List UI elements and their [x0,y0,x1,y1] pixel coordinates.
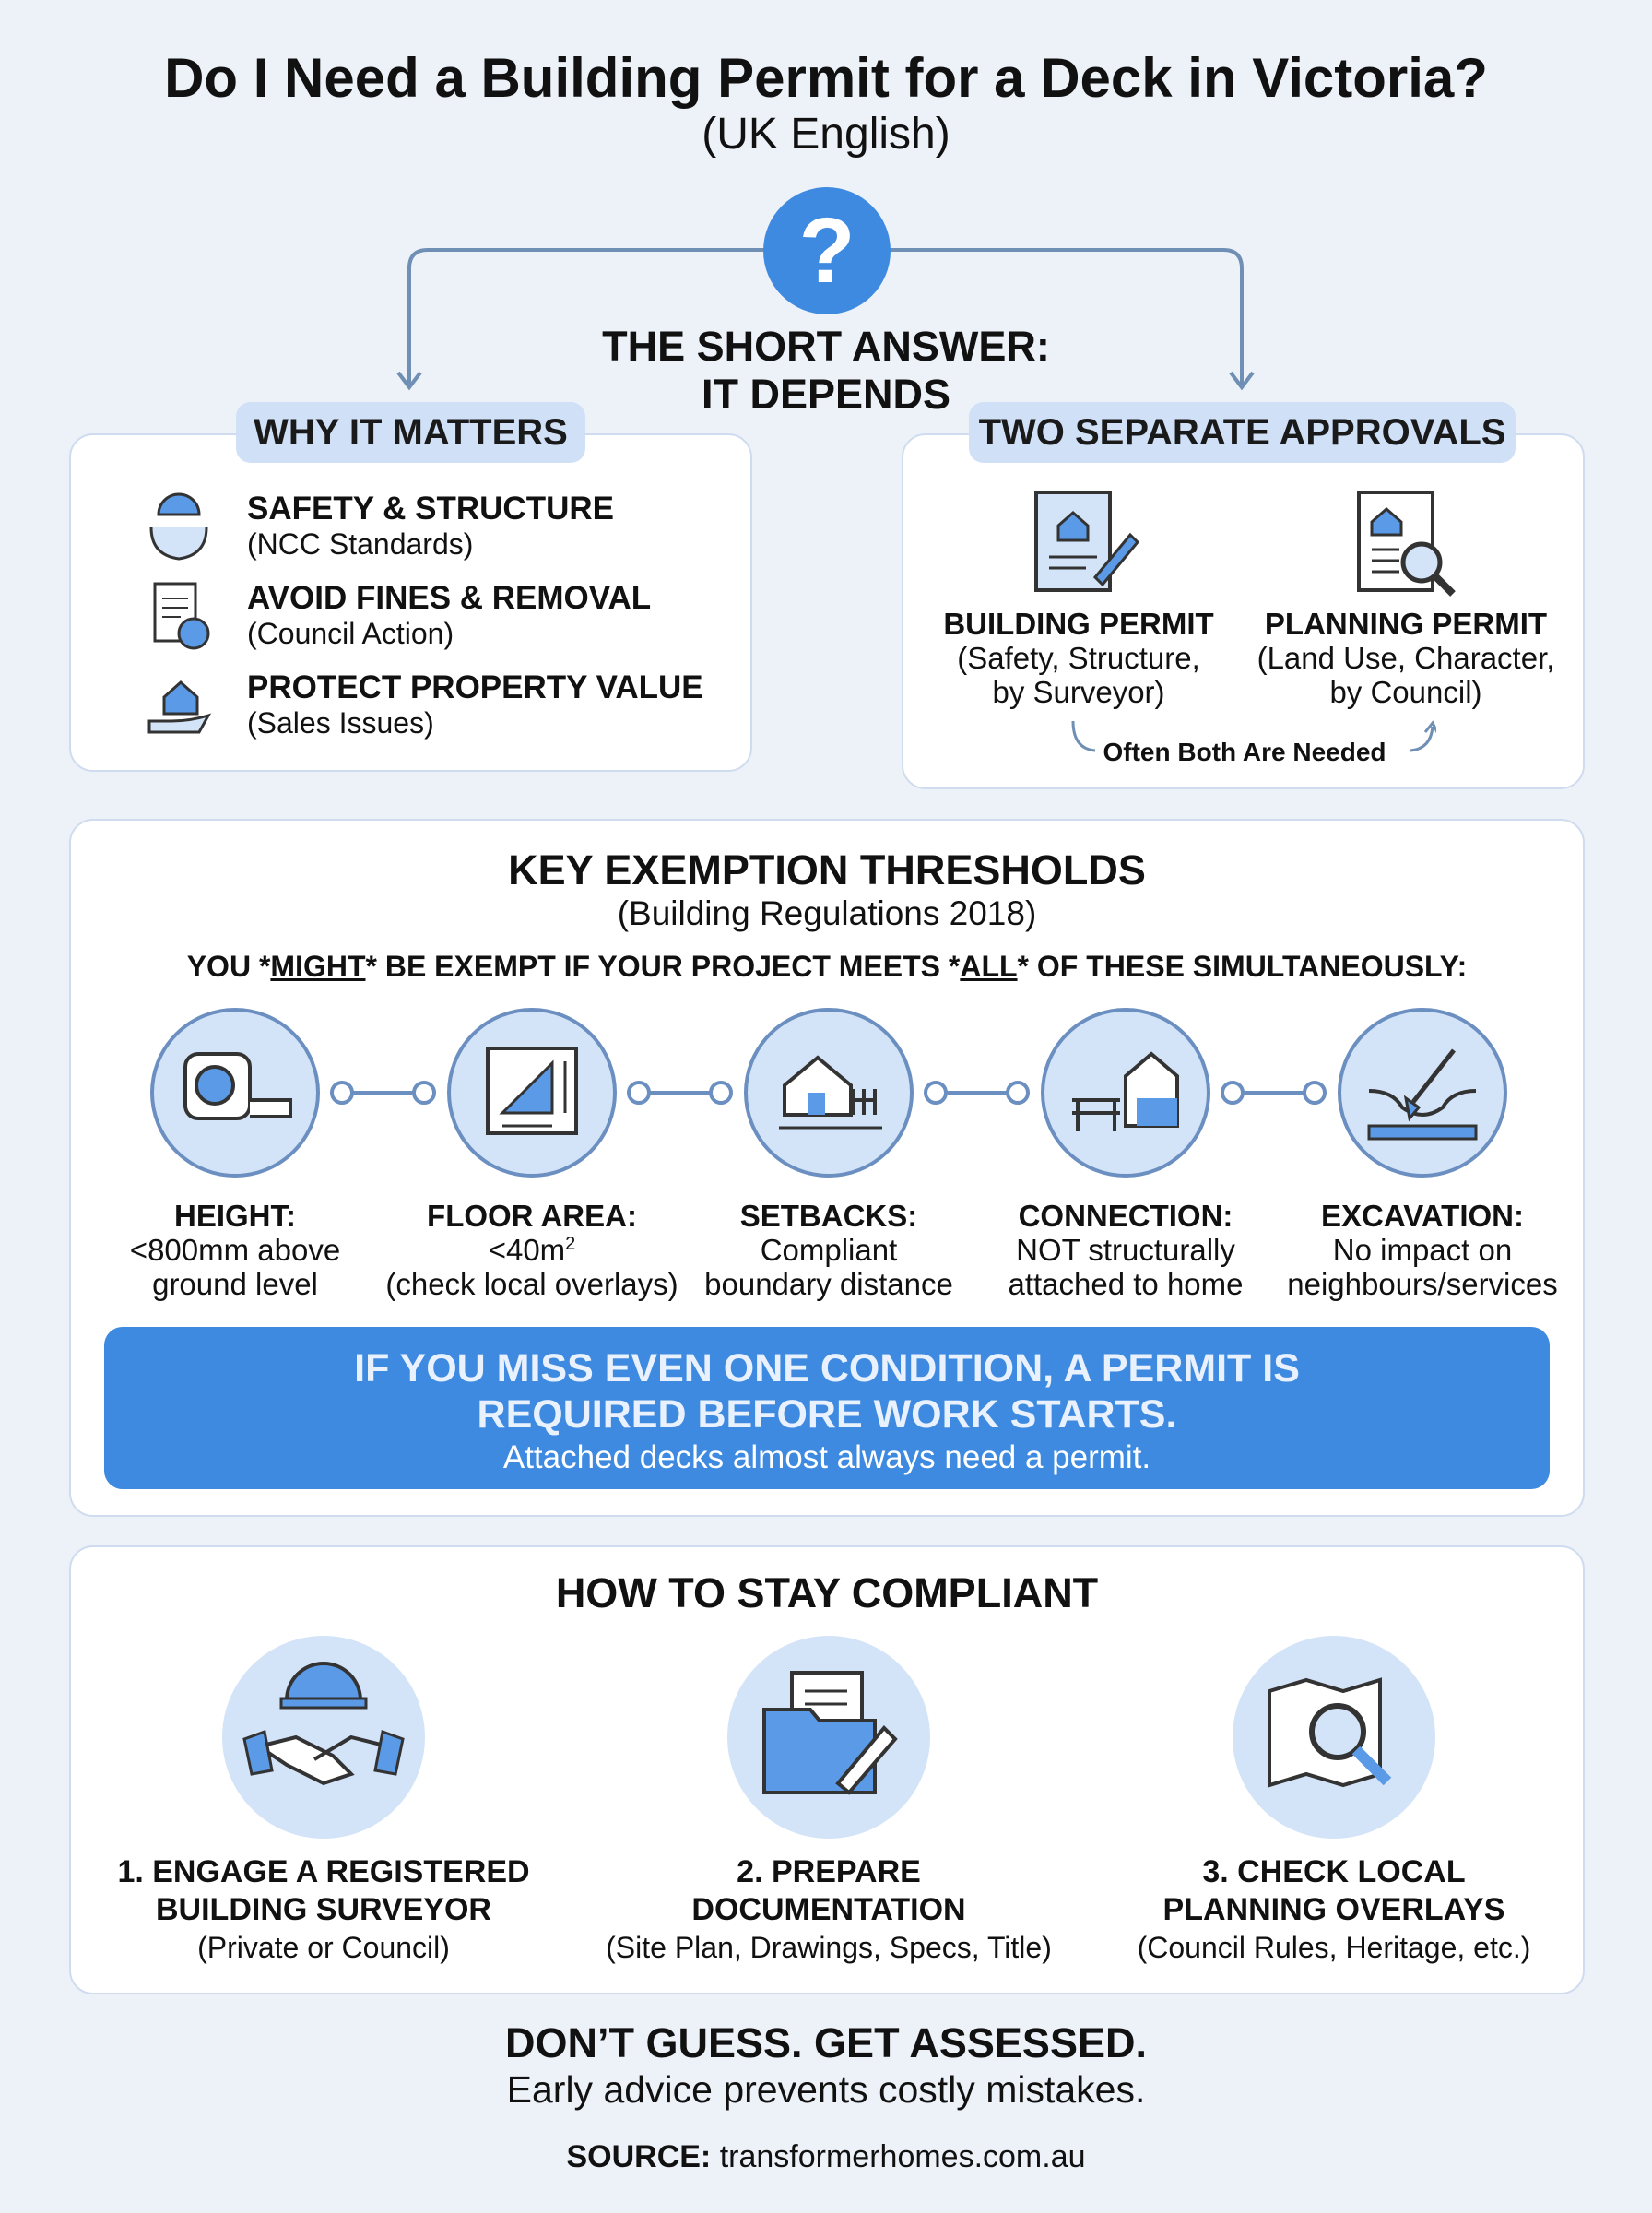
footer message: Early advice prevents costly mistakes. [507,2068,1145,2111]
label: excavation: neighbours/services [1287,1267,1558,1301]
label: floor area [385,1199,678,1301]
step 3: (Council Rules, Heritage, etc.) [1138,1931,1530,1964]
callout banner: IF YOU MISS EVEN ONE CONDITION, A PERMIT IS [354,1346,1300,1391]
panel: why it matters: (NCC Standards) [247,527,473,561]
callout banner: Attached decks almost always need a permit. [503,1439,1150,1475]
chain connectors [330,1081,1327,1105]
panel: two approvals [902,433,1585,789]
item: safety [149,491,614,561]
label: floor area: FLOOR AREA: [427,1199,637,1233]
label: excavation [1287,1199,1558,1301]
heading: two approvals [969,402,1516,463]
text: building permit: BUILDING PERMIT [943,607,1214,641]
label: height: HEIGHT: [174,1199,296,1233]
label: floor area: <40m2 [489,1233,575,1267]
panel: why it matters: (Sales Issues) [247,706,434,740]
icon: floor area [447,1008,617,1178]
text: building permit [943,607,1214,709]
step 2: 2. PREPARE [737,1854,921,1889]
step 2: (Site Plan, Drawings, Specs, Title) [606,1931,1052,1964]
icon: surveyor handshake [222,1636,425,1839]
panel: why it matters: (Council Action) [247,617,454,650]
source: SOURCE: transformerhomes.com.au [566,2139,1086,2174]
step 2 [606,1854,1052,1964]
icon: planning permit [1357,491,1456,597]
short answer: IT DEPENDS [702,371,950,418]
label: excavation: No impact on [1333,1233,1512,1267]
label: floor area: (check local overlays) [385,1267,678,1301]
heading: why it matters [236,402,585,463]
label: connection [1008,1199,1243,1301]
text: planning permit: PLANNING PERMIT [1265,607,1547,641]
icon: height [150,1008,320,1178]
label: height: <800mm above [130,1233,340,1267]
text: planning permit: by Council) [1329,675,1482,709]
step 3: 3. CHECK LOCAL [1202,1854,1466,1889]
step 3: PLANNING OVERLAYS [1163,1892,1504,1927]
icon: documentation [727,1636,930,1839]
heading: why it matters: WHY IT MATTERS [254,412,568,453]
step 2: DOCUMENTATION [691,1892,966,1927]
icon: connection [1041,1008,1210,1178]
label: height: ground level [152,1267,318,1301]
heading: HOW TO STAY COMPLIANT [556,1569,1098,1616]
connector arrows [396,248,1254,391]
panel: key exemption thresholds: (Building Regulations 2018) [618,894,1036,932]
short answer [602,323,1050,418]
label: height [130,1199,340,1301]
label: excavation: EXCAVATION: [1321,1199,1524,1233]
icon: question mark [763,187,891,314]
label: setbacks: boundary distance [704,1267,953,1301]
icon: building permit [1034,491,1139,592]
icon: planning overlays [1233,1636,1435,1839]
label: setbacks: Compliant [761,1233,897,1267]
step 1: BUILDING SURVEYOR [156,1892,491,1927]
step 1 [117,1854,530,1964]
step 1: 1. ENGAGE A REGISTERED [117,1854,530,1889]
label: setbacks [704,1199,953,1301]
text: planning permit: (Land Use, Character, [1257,641,1554,675]
title: Do I Need a Building Permit for a Deck in Victoria? [164,47,1488,109]
subtitle: (UK English) [702,110,950,159]
text: building permit: (Safety, Structure, [957,641,1200,675]
icon: question mark: ? [798,199,856,302]
callout banner [104,1327,1550,1489]
short answer: THE SHORT ANSWER: [602,323,1050,370]
text: building permit: by Surveyor) [992,675,1165,709]
step 3 [1138,1854,1530,1964]
callout banner: REQUIRED BEFORE WORK STARTS. [478,1392,1176,1437]
heading: two approvals: TWO SEPARATE APPROVALS [979,412,1505,453]
item: fines [153,580,651,650]
icon: excavation [1338,1008,1507,1178]
heading: KEY EXEMPTION THRESHOLDS [508,846,1146,893]
label: connection: NOT structurally [1016,1233,1235,1267]
label: setbacks: SETBACKS: [740,1199,917,1233]
item: value [148,669,703,740]
text: planning permit [1257,607,1554,709]
icon: setbacks [744,1008,914,1178]
panel: how to stay compliant [69,1545,1585,1994]
panel: key exemption thresholds: YOU *MIGHT* BE EXEMPT IF YOUR PROJECT MEETS *ALL* OF THESE SIMULTANEOUSLY: [187,950,1467,983]
step 1: (Private or Council) [197,1931,450,1964]
footer message: DON’T GUESS. GET ASSESSED. [505,2019,1147,2066]
note: often both: Often Both Are Needed [1103,738,1386,766]
label: connection: CONNECTION: [1019,1199,1233,1233]
panel: why it matters [69,433,752,772]
panel: key exemption thresholds [69,819,1585,1517]
panel: why it matters: PROTECT PROPERTY VALUE [247,669,703,705]
footer message [505,2019,1147,2111]
label: connection: attached to home [1008,1267,1243,1301]
panel: why it matters: SAFETY & STRUCTURE [247,491,614,527]
panel: why it matters: AVOID FINES & REMOVAL [247,580,651,616]
